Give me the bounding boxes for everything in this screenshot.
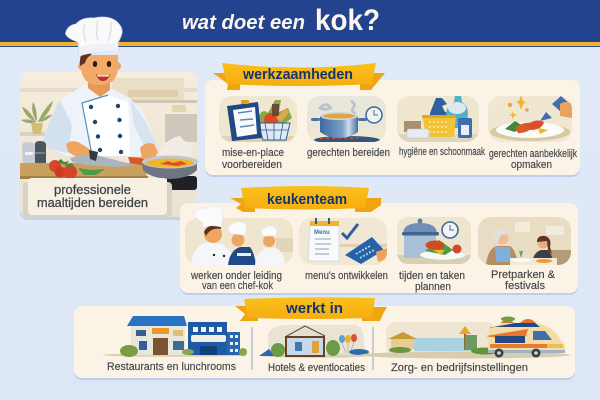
label: tijden en taken: tijden en taken	[399, 270, 465, 282]
title	[182, 4, 380, 37]
icon: hotel event tent with balloons	[259, 325, 369, 358]
panel: chef illustration	[20, 17, 198, 220]
icon: clipboard and vegetable basket	[219, 96, 297, 142]
icon: coastal care facility and food truck	[360, 316, 570, 358]
icon: salt and pepper shakers	[22, 141, 46, 172]
label: plannen: plannen	[415, 281, 451, 293]
header banner	[0, 0, 600, 47]
label: Pretparken &: Pretparken &	[491, 269, 556, 281]
label: Zorg- en bedrijfsinstellingen: Zorg- en bedrijfsinstellingen	[391, 362, 528, 374]
icon: cleaning supplies	[397, 95, 479, 142]
heading ribbon: werkzaamheden: werkzaamheden	[242, 66, 353, 83]
blue uniform cook	[228, 222, 256, 265]
label: menu's ontwikkelen: menu's ontwikkelen	[305, 270, 388, 282]
heading ribbon: werkt in	[235, 297, 387, 321]
title: wat doet een	[182, 12, 305, 34]
heading ribbon: werkt in: werkt in	[285, 300, 343, 317]
icon: steaming pot	[307, 96, 386, 144]
icon: menu and payment terminal	[299, 218, 387, 265]
icon: plated dish with sauce	[488, 95, 572, 142]
label: hygiene en schoonmaak: hygiëne en schoonmaak	[399, 146, 485, 158]
white uniform cook	[255, 226, 285, 265]
label: Hotels & eventlocaties: Hotels & eventlocaties	[268, 362, 365, 374]
jacket buttons	[89, 104, 123, 154]
label: mise-en-place: mise-en-place	[222, 147, 284, 159]
panel: werkzaamheden	[205, 63, 580, 177]
hands and knife	[66, 141, 158, 167]
icon: restaurant and lunchroom buildings	[103, 316, 247, 357]
icon: cloche with dish and clock	[397, 217, 471, 264]
panel: werkt in	[74, 297, 575, 380]
label: Restaurants en lunchrooms: Restaurants en lunchrooms	[107, 361, 236, 373]
chef head	[78, 52, 121, 97]
label: gerechten aanbekkelijk: gerechten aanbekkelijk	[489, 148, 577, 160]
title: kok?	[315, 4, 380, 37]
panel: keukenteam	[180, 186, 578, 295]
label: festivals: festivals	[505, 280, 545, 292]
caption: professionele maaltijden bereiden: maaltijden bereiden	[37, 196, 148, 210]
label: voorbereiden: voorbereiden	[222, 159, 282, 171]
divider	[252, 327, 373, 370]
label: gerechten bereiden: gerechten bereiden	[307, 147, 390, 159]
icon: elderly woman and girl at table	[478, 217, 571, 265]
chef figure	[44, 17, 157, 156]
icon: kitchen team	[185, 206, 293, 265]
chef jacket	[44, 84, 157, 156]
cutting board with vegetables	[20, 157, 148, 179]
icon: menu and payment terminal: Menu	[314, 230, 330, 236]
caption: professionele maaltijden bereiden	[23, 178, 172, 217]
label: werken onder leiding: werken onder leiding	[190, 270, 282, 282]
heading ribbon: werkzaamheden	[213, 63, 385, 90]
icon: frying pan	[142, 156, 198, 190]
heading ribbon: keukenteam: keukenteam	[267, 191, 347, 208]
kitchen background	[20, 72, 197, 220]
head chef	[191, 206, 235, 265]
icon: potted plant	[21, 101, 53, 134]
label: van een chef-kok: van een chef-kok	[202, 280, 273, 292]
chef hat	[66, 17, 122, 56]
caption: professionele maaltijden bereiden: professionele	[54, 183, 131, 197]
heading ribbon: keukenteam	[230, 186, 381, 212]
label: opmaken: opmaken	[511, 159, 552, 171]
